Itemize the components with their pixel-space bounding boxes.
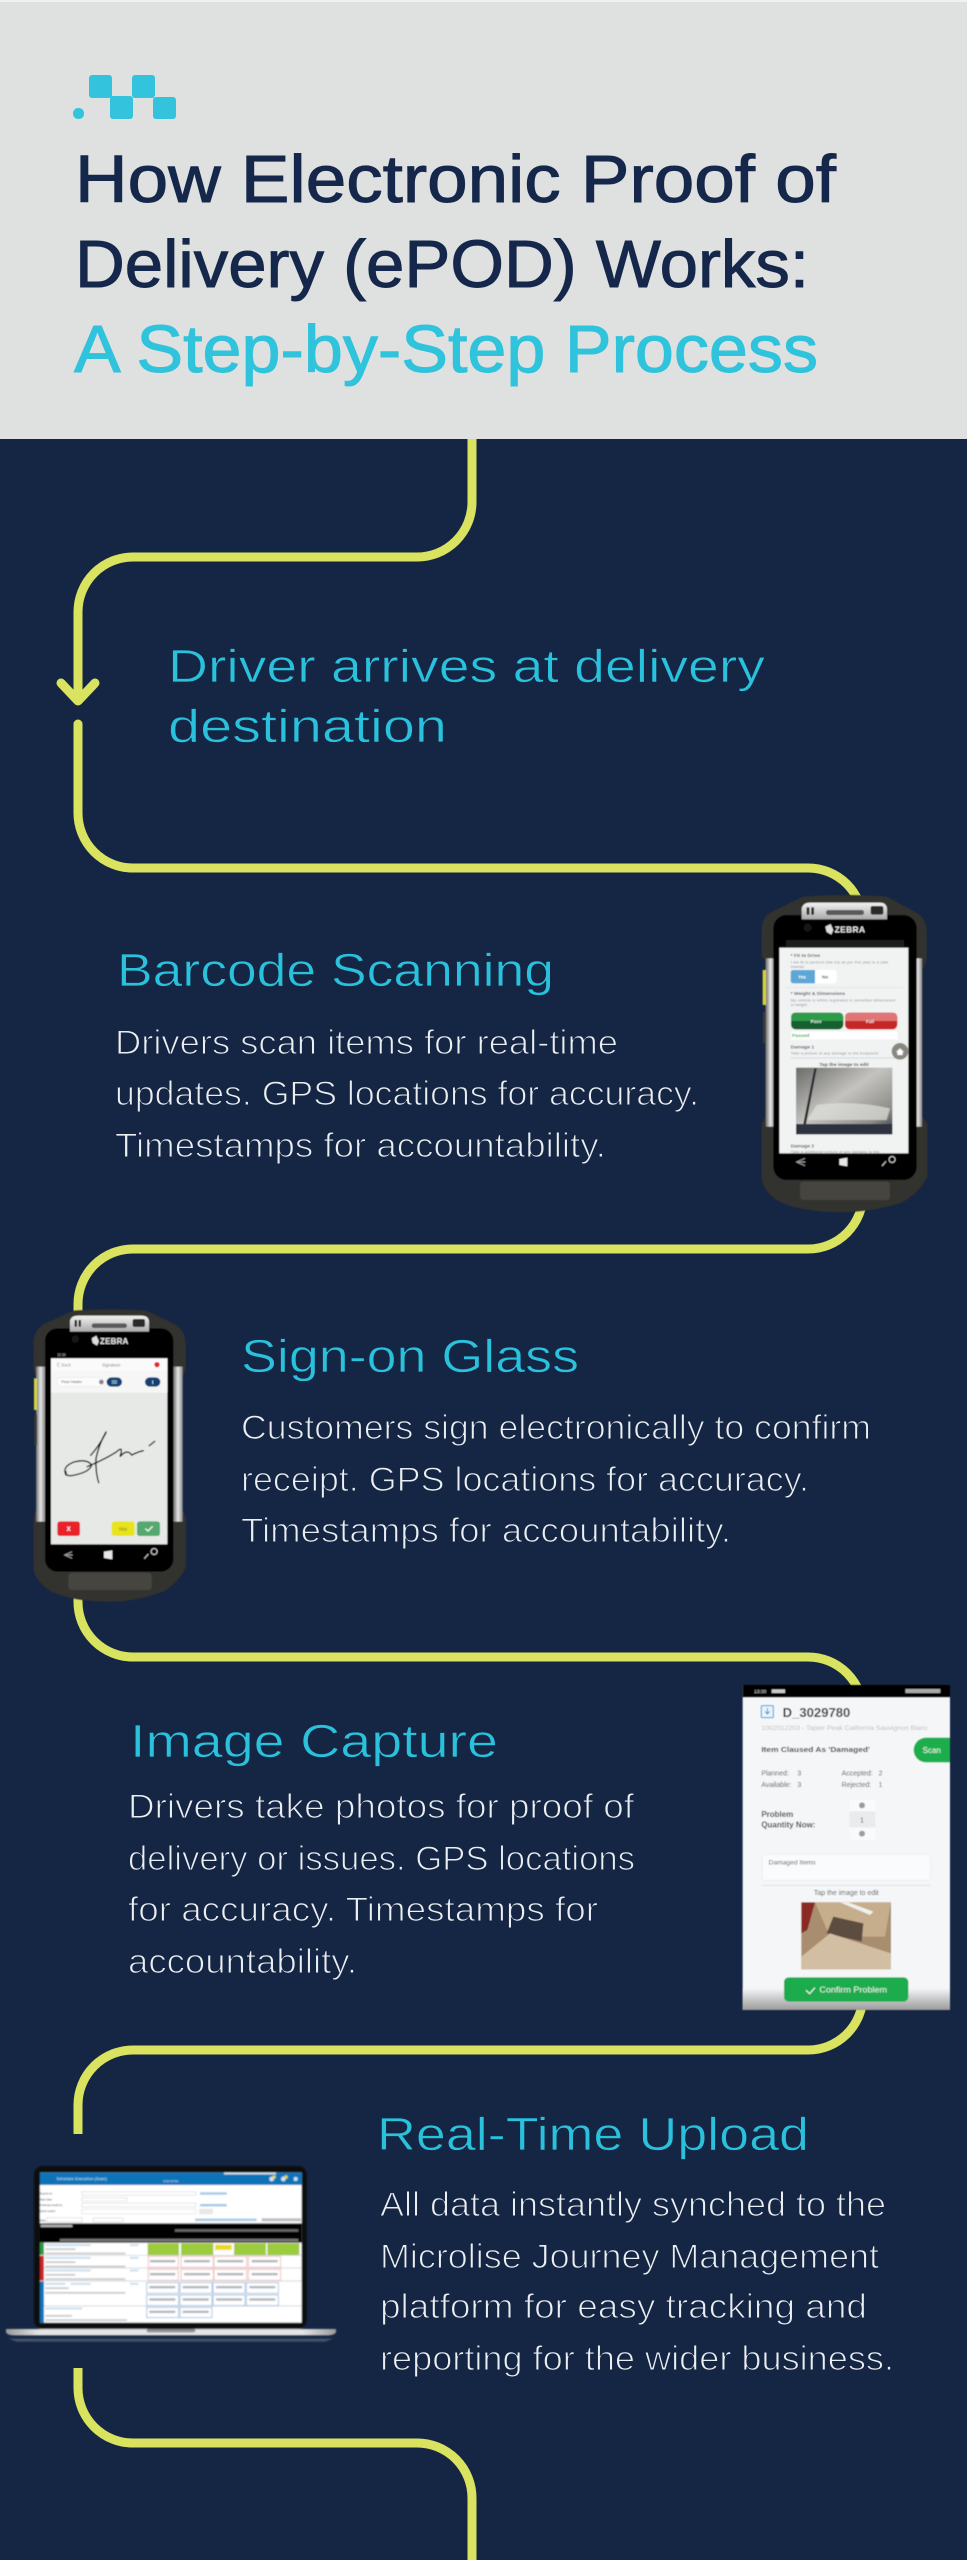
description: real-time upload: Microlise Journey Management xyxy=(380,2238,880,2276)
device: app screen with damaged item report xyxy=(743,1685,950,2010)
device: app screen with damaged item report: 2 xyxy=(879,1771,883,1778)
device: handheld with signature capture: 12:30 xyxy=(57,1353,66,1357)
icon: Microlise logo xyxy=(73,75,176,119)
connector: barcode scanning to sign-on glass xyxy=(78,1194,863,1320)
device: handheld with inspection form: * Fit to Drive xyxy=(791,953,820,959)
device: handheld with inspection form: Damage 2 xyxy=(791,1144,814,1150)
heading: image capture: Image Capture xyxy=(130,1715,498,1767)
step: driver arrives heading xyxy=(168,640,765,752)
device: handheld with signature capture: Paul Hasler xyxy=(61,1379,83,1384)
description: barcode scanning: updates. GPS locations for accuracy. xyxy=(115,1075,699,1113)
device: app screen with damaged item report: 1 xyxy=(879,1782,883,1789)
dashboard screen: Quick search xyxy=(40,2209,56,2213)
device: app screen with damaged item report: Problem xyxy=(761,1810,793,1819)
device: app screen with damaged item report: Quantity Now: xyxy=(761,1821,815,1830)
description: image capture: for accuracy. Timestamps for xyxy=(128,1891,598,1929)
description: image capture: Drivers take photos for proof of xyxy=(128,1788,635,1826)
title: A Step-by-Step Process xyxy=(74,312,818,387)
device: handheld with inspection form: manner. xyxy=(791,964,805,969)
description: barcode scanning: Timestamps for accountability. xyxy=(115,1127,606,1165)
signature xyxy=(65,1432,155,1483)
description: real-time upload: platform for easy tracking and xyxy=(380,2288,867,2326)
description: barcode scanning xyxy=(115,1024,699,1165)
heading: sign-on glass: Sign-on Glass xyxy=(241,1330,579,1382)
device: handheld with signature capture: ZEBRA xyxy=(100,1337,129,1346)
description: barcode scanning: Drivers scan items for real-time xyxy=(115,1024,618,1062)
device: app screen with damaged item report: D_3029780 xyxy=(783,1705,850,1720)
device: handheld with inspection form: Take a picture of any damage to the bodywork. xyxy=(791,1050,879,1055)
step: real-time upload text xyxy=(377,2108,894,2378)
dashboard screen: Filter xyxy=(40,2218,46,2222)
description: image capture: delivery or issues. GPS locations xyxy=(128,1840,635,1878)
device: app screen with damaged item report: 13:30 xyxy=(754,1689,767,1695)
device: app screen with damaged item report: Tap the image to edit xyxy=(814,1890,879,1897)
schedule cards xyxy=(148,2243,299,2255)
device: handheld with inspection form: Passed xyxy=(792,1033,809,1039)
step: driver arrives heading: destination xyxy=(168,700,447,752)
laptop body xyxy=(34,2166,307,2329)
dashboard screen: microlise xyxy=(163,2179,179,2183)
step: driver arrives heading: Driver arrives at delivery xyxy=(168,640,765,692)
device: handheld with inspection form: Pass xyxy=(811,1019,822,1024)
description: sign-on glass: receipt. GPS locations for accuracy. xyxy=(241,1461,809,1499)
description: real-time upload xyxy=(380,2186,894,2378)
device: handheld with inspection form: My vehicle is within legislated or permitted dimensions xyxy=(791,998,895,1003)
description: sign-on glass xyxy=(241,1409,871,1550)
device: app screen with damaged item report: Scan xyxy=(923,1746,941,1755)
device: handheld with inspection form: or weight. xyxy=(791,1002,808,1007)
title xyxy=(74,142,836,387)
device: handheld with inspection form: Take a additional picture of any damage to the xyxy=(791,1149,880,1154)
status bars xyxy=(40,2243,44,2255)
device: app screen with damaged item report: Available: xyxy=(761,1782,792,1789)
device: app screen with damaged item report: Damaged Items xyxy=(769,1859,816,1866)
connector: arrival to barcode scanning xyxy=(78,724,863,923)
device: handheld with inspection form: Fail xyxy=(866,1019,874,1024)
device: laptop with journey management dashboard xyxy=(6,2166,336,2342)
heading: barcode scanning: Barcode Scanning xyxy=(117,944,554,996)
device: handheld with inspection form xyxy=(762,895,927,1212)
connector: image capture to real-time upload xyxy=(78,1995,863,2134)
device: handheld with inspection form: I am fit to perform this trip as per this plan in a safe xyxy=(791,960,889,965)
connector: real-time upload to page end xyxy=(78,2368,472,2560)
device: handheld with signature capture: X xyxy=(67,1527,71,1533)
device: app screen with damaged item report: 3 xyxy=(797,1771,801,1778)
device: handheld with inspection form: Yes xyxy=(798,975,806,980)
device: app screen with damaged item report: 1 xyxy=(860,1815,864,1824)
step: barcode scanning text xyxy=(115,944,699,1165)
device: app screen with damaged item report: Item Claused As 'Damaged' xyxy=(761,1745,870,1754)
step: image capture text xyxy=(128,1715,635,1981)
device: handheld with inspection form: * Weight & Dimensions xyxy=(791,991,845,997)
description: real-time upload: All data instantly synched to the xyxy=(380,2186,886,2224)
device: handheld with inspection form: ZEBRA xyxy=(835,925,865,935)
device: app screen with damaged item report: Planned: xyxy=(761,1771,789,1778)
dashboard screen: Ordering results by xyxy=(40,2203,63,2207)
dashboard screen: Schedule Execution (Scan) xyxy=(57,2177,107,2181)
device: handheld with signature capture: Skip xyxy=(119,1526,128,1531)
device: app screen with damaged item report: 1002012203 - Tapier Peak California Sauvignon Blanc xyxy=(761,1725,928,1732)
step: sign-on glass text xyxy=(241,1330,871,1550)
description: sign-on glass: Customers sign electronically to confirm xyxy=(241,1409,871,1447)
description: sign-on glass: Timestamps for accountability. xyxy=(241,1512,731,1550)
connector: header to arrival with arrow xyxy=(61,439,472,701)
device: app screen with damaged item report: Rejected: xyxy=(842,1782,871,1789)
device: handheld with inspection form: Damage 1 xyxy=(791,1044,814,1050)
dashboard screen: Start Date xyxy=(40,2197,52,2201)
description: image capture xyxy=(128,1788,635,1981)
description: image capture: accountability. xyxy=(128,1943,357,1981)
title: How Electronic Proof of xyxy=(75,142,836,217)
device: app screen with damaged item report: Accepted: xyxy=(842,1771,873,1778)
device: handheld with inspection form: Tap the image to edit xyxy=(819,1062,869,1068)
connector: sign-on glass to image capture xyxy=(78,1590,863,1712)
device: app screen with damaged item report: 3 xyxy=(797,1782,801,1789)
device: handheld with inspection form: No xyxy=(822,975,828,980)
title: Delivery (ePOD) Works: xyxy=(75,227,809,302)
device: handheld with signature capture: Signature xyxy=(102,1362,121,1367)
device: handheld with signature capture: Back xyxy=(61,1362,72,1367)
device: handheld with signature capture xyxy=(33,1309,186,1602)
journey rows xyxy=(45,2244,138,2309)
header panel xyxy=(0,0,967,439)
device: app screen with damaged item report: Confirm Problem xyxy=(819,1985,887,1995)
description: real-time upload: reporting for the wider business. xyxy=(380,2340,894,2378)
dashboard screen: Search for xyxy=(40,2191,52,2195)
heading: real-time upload: Real-Time Upload xyxy=(377,2108,809,2160)
dashboard screen xyxy=(40,2173,302,2323)
